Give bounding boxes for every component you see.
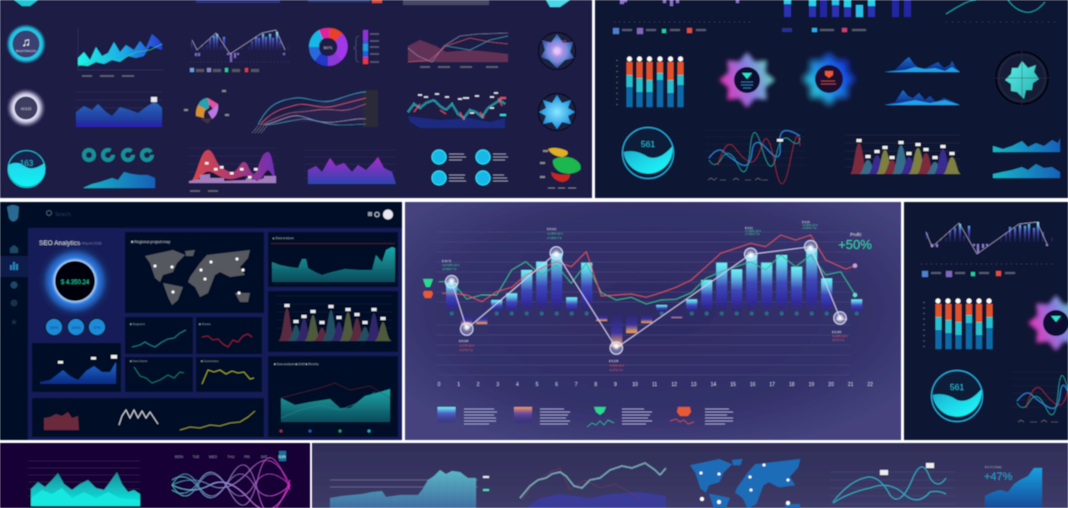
- music gauge: [8, 26, 44, 62]
- panel: bottom-left wave charts: [0, 443, 310, 508]
- eclipse gauge: 40115: [21, 106, 32, 111]
- +47% callout: +47%: [984, 471, 1013, 483]
- x axis labels: 19: [809, 382, 814, 388]
- data point annotations: +3.00% 7 d: [802, 226, 817, 230]
- 3D stacked sphere chart: [540, 148, 581, 188]
- red area chart: [44, 412, 79, 430]
- star gauge: pink: [719, 52, 775, 108]
- x axis labels: 4: [516, 382, 519, 388]
- cyan layered mountain chart: [28, 461, 140, 506]
- bottom card with three charts: [32, 398, 264, 437]
- blue area chart: [985, 468, 1042, 508]
- eclipse gauge: [10, 92, 42, 124]
- regional project map: ■ Regional project map: [131, 240, 170, 244]
- white trend line with markers: [446, 240, 846, 354]
- x axis labels: 9: [614, 382, 617, 388]
- x axis labels: 20: [828, 382, 834, 388]
- data point annotations: $ 8.283: [832, 330, 842, 334]
- teal area chart: [83, 172, 155, 188]
- x axis labels: 21: [848, 382, 854, 388]
- water gauge 561: [622, 128, 674, 178]
- data point annotations: -4.90% 12 h: [609, 364, 625, 368]
- donut chart: [309, 28, 379, 66]
- water gauge 561: 561: [950, 382, 964, 392]
- day selector: FRI: [244, 455, 250, 459]
- percentage rings: 100%: [50, 326, 58, 330]
- multi-line oscillation chart: [705, 130, 805, 184]
- sidebar navigation: ★: [10, 317, 18, 327]
- percentage rings: 97%: [93, 326, 101, 330]
- cropped line chart: [1012, 372, 1068, 422]
- clipped top row charts: [14, 0, 570, 7]
- data point annotations: [442, 220, 848, 372]
- interwoven waves chart: [172, 458, 290, 508]
- x axis labels: 18: [789, 382, 795, 388]
- profit callout: [838, 232, 872, 297]
- data point annotations: -4.17% 7 d: [459, 348, 473, 352]
- sidebar navigation: [0, 205, 28, 327]
- stacked bar chart: [924, 298, 992, 349]
- green line: [439, 255, 855, 304]
- x axis labels: 11: [652, 382, 657, 388]
- data point annotations: -5.00% 12 h: [832, 334, 848, 338]
- 3D ring chart: [184, 90, 229, 124]
- SEO summary card: [39, 240, 106, 336]
- KPI tile: conversion: [196, 357, 262, 392]
- clipped line chart top: [946, 0, 1056, 22]
- purple mountains: [304, 150, 396, 184]
- data analysis stacked area card: [268, 356, 398, 437]
- KPI tile: new users: ■ New Users: [130, 359, 148, 363]
- data point annotations: $ 49.72: [442, 259, 452, 263]
- yellow-green line chart: [180, 411, 255, 430]
- data point annotations: $ 8.098: [459, 339, 469, 343]
- KPI tile: shows: ■ Shows: [199, 322, 211, 326]
- data point annotations: +7.00% 7 d: [745, 232, 760, 236]
- data analysis area chart: [268, 232, 398, 287]
- panel: SEO analytics dashboard: [0, 202, 402, 440]
- data point annotations: -4.17% 7 d: [609, 368, 623, 372]
- x axis labels: 13: [691, 382, 697, 388]
- day selector: SUN: [278, 455, 286, 459]
- bar chart: mini profit: [190, 30, 290, 72]
- x axis labels: 2: [477, 382, 480, 388]
- music gauge: ♫: [22, 35, 30, 49]
- data point annotations: -1.17% 12 h: [459, 344, 475, 348]
- revenue eclipse gauge: $ 4.350.24: [61, 280, 90, 286]
- panel: top-left dashboard collection: [0, 0, 592, 198]
- +47% callout: [984, 465, 1013, 483]
- data analysis stacked area card: ■ Data analysis ■ 2018 ■ Monthly: [274, 362, 319, 366]
- panel: bottom-right chart strip: [312, 443, 1068, 508]
- stacked bar chart: [617, 56, 684, 107]
- radar chart: teal: [994, 50, 1050, 106]
- percentage rings: 100%: [72, 326, 80, 330]
- mountain chart: [188, 148, 276, 191]
- positive bars: [446, 248, 862, 311]
- data point annotations: $ 8.022: [547, 227, 557, 231]
- horizontal grid lines: [436, 232, 850, 375]
- data point annotations: +1.05% 12 h: [547, 232, 563, 236]
- KPI tile: segment: ■ Segment: [130, 322, 145, 326]
- day selector: WED: [209, 455, 218, 459]
- world map: [145, 250, 250, 305]
- water gauge 561: 561: [641, 139, 655, 149]
- SEO summary card: SEO Analytics: [39, 240, 81, 247]
- legend: [438, 407, 733, 427]
- x axis labels: 15: [730, 382, 736, 388]
- profit callout: Profit:: [850, 232, 862, 237]
- zero-line markers: [450, 312, 859, 316]
- panel: top-right dashboard collection: [595, 0, 1068, 198]
- teal area sparklines: [993, 138, 1060, 178]
- water gauge 163: [8, 150, 45, 188]
- x axis labels: 5: [536, 382, 539, 388]
- radar chart 1: [538, 32, 576, 70]
- profit callout: +50%: [838, 237, 872, 252]
- blue area chart: [75, 92, 162, 127]
- star gauge: pink: [1028, 295, 1068, 351]
- x axis labels: 16: [750, 382, 756, 388]
- KPI tile: shows: [196, 317, 262, 354]
- line chart with callouts: [830, 463, 955, 504]
- day selector: TUE: [192, 455, 200, 459]
- data point annotations: +7.00% 12 h: [745, 229, 761, 233]
- day selector: [175, 451, 286, 461]
- cyan feature icons with text: [432, 150, 508, 185]
- candlestick chart: [408, 93, 506, 128]
- icon: bear: [423, 291, 433, 298]
- wave area charts: [884, 57, 960, 105]
- search box and user icons: Search: [55, 212, 71, 218]
- x axis labels: 3: [496, 382, 499, 388]
- small ring gauges: [84, 150, 152, 160]
- world map: [690, 459, 800, 508]
- KPI tile: segment: [125, 317, 193, 354]
- SEO summary card: • Report 2018: [80, 242, 102, 246]
- x axis labels: [438, 382, 873, 388]
- data point annotations: +5.00% 7 d: [442, 267, 457, 271]
- multi-line chart: [252, 90, 378, 133]
- mountain peaks card: [268, 291, 398, 352]
- day selector: MON: [175, 455, 184, 459]
- x axis labels: 8: [594, 382, 597, 388]
- mountain peak chart: [845, 135, 961, 174]
- panel: profit bar and line chart: [405, 202, 901, 440]
- x axis labels: 12: [671, 382, 677, 388]
- x axis labels: 7: [575, 382, 578, 388]
- day selector: SAT: [261, 455, 268, 459]
- music gauge: BACKTRACKS: [16, 49, 36, 53]
- x axis labels: 1: [457, 382, 460, 388]
- blue area chart card: [32, 343, 121, 392]
- donut chart: 5071: [324, 45, 333, 50]
- icon: bull: [423, 279, 433, 287]
- percentage rings: [44, 318, 106, 336]
- teal histogram: [330, 470, 489, 508]
- clipped mini chart top: [613, 0, 754, 34]
- data point annotations: +10.02% 12 h: [442, 263, 460, 267]
- panel: cropped dashboard collection: [904, 202, 1068, 440]
- data analysis area chart: ▲ Data analysis: [272, 236, 294, 240]
- data point annotations: $ 8.228: [609, 359, 619, 363]
- red line: [442, 235, 855, 302]
- candlestick line chart: [520, 463, 666, 508]
- KPI tile: new users: [125, 357, 193, 392]
- +47% callout: $ 2.4 1 Daily: [985, 465, 1002, 469]
- x axis labels: 0: [438, 382, 441, 388]
- data point annotations: -8.7% 7 d: [832, 338, 844, 342]
- KPI tile: conversion: ■ Conversion: [201, 359, 219, 363]
- data point annotations: +7.00% 7 d: [547, 236, 562, 240]
- data point annotations: $ 9.51: [745, 226, 753, 230]
- x axis labels: 17: [769, 382, 775, 388]
- water gauge 163: 163: [20, 159, 34, 168]
- data point annotations: $ 9.66: [802, 220, 810, 224]
- x axis labels: 14: [711, 382, 716, 388]
- data point annotations: +3.00% 12 h: [802, 223, 818, 227]
- area line chart: [408, 33, 508, 67]
- white line chart: [119, 410, 158, 425]
- clipped bar chart top: [782, 0, 911, 32]
- mini profit chart: [921, 222, 1056, 277]
- day selector: THU: [227, 455, 235, 459]
- negative bars: [461, 315, 847, 347]
- x axis labels: 22: [867, 382, 873, 388]
- regional project map: [125, 232, 264, 313]
- x axis labels: 10: [632, 382, 638, 388]
- star gauge: blue: [802, 52, 856, 106]
- water gauge 561: [932, 370, 982, 422]
- wave chart: cyan: [78, 28, 163, 76]
- radar chart 2: [538, 94, 576, 130]
- search box and user icons: [46, 210, 393, 220]
- x axis labels: 6: [555, 382, 558, 388]
